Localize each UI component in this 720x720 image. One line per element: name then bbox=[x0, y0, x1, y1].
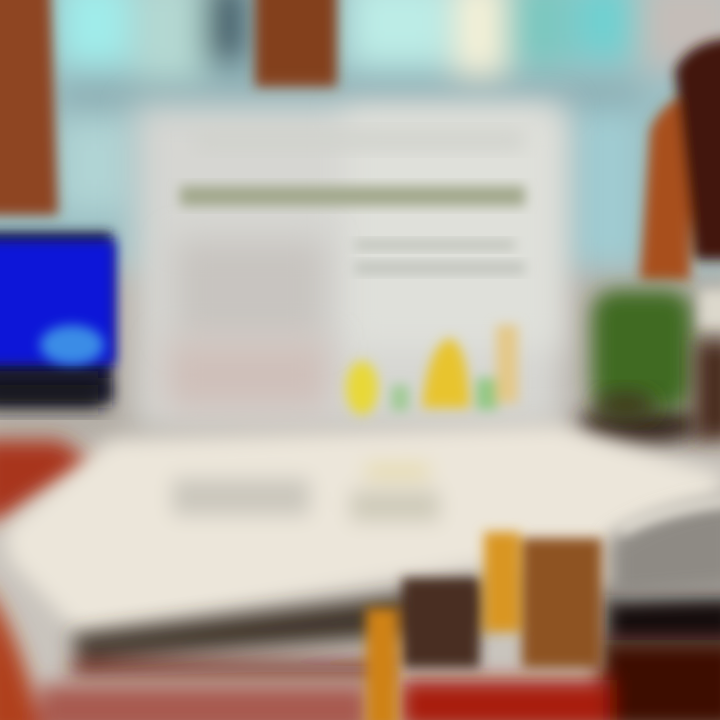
laptop bbox=[0, 232, 115, 408]
cups bbox=[366, 532, 602, 720]
bottom red table bbox=[0, 580, 720, 720]
paper sheet bbox=[135, 105, 565, 430]
bar chart bbox=[346, 325, 518, 415]
sheet title bbox=[180, 186, 525, 206]
wooden pillars bbox=[0, 0, 720, 280]
open book right bbox=[605, 498, 720, 645]
plant bbox=[578, 290, 720, 445]
dark book edge bbox=[70, 585, 480, 676]
white table surface bbox=[5, 425, 720, 635]
red table edge left bbox=[0, 440, 95, 520]
window background bbox=[0, 0, 720, 450]
